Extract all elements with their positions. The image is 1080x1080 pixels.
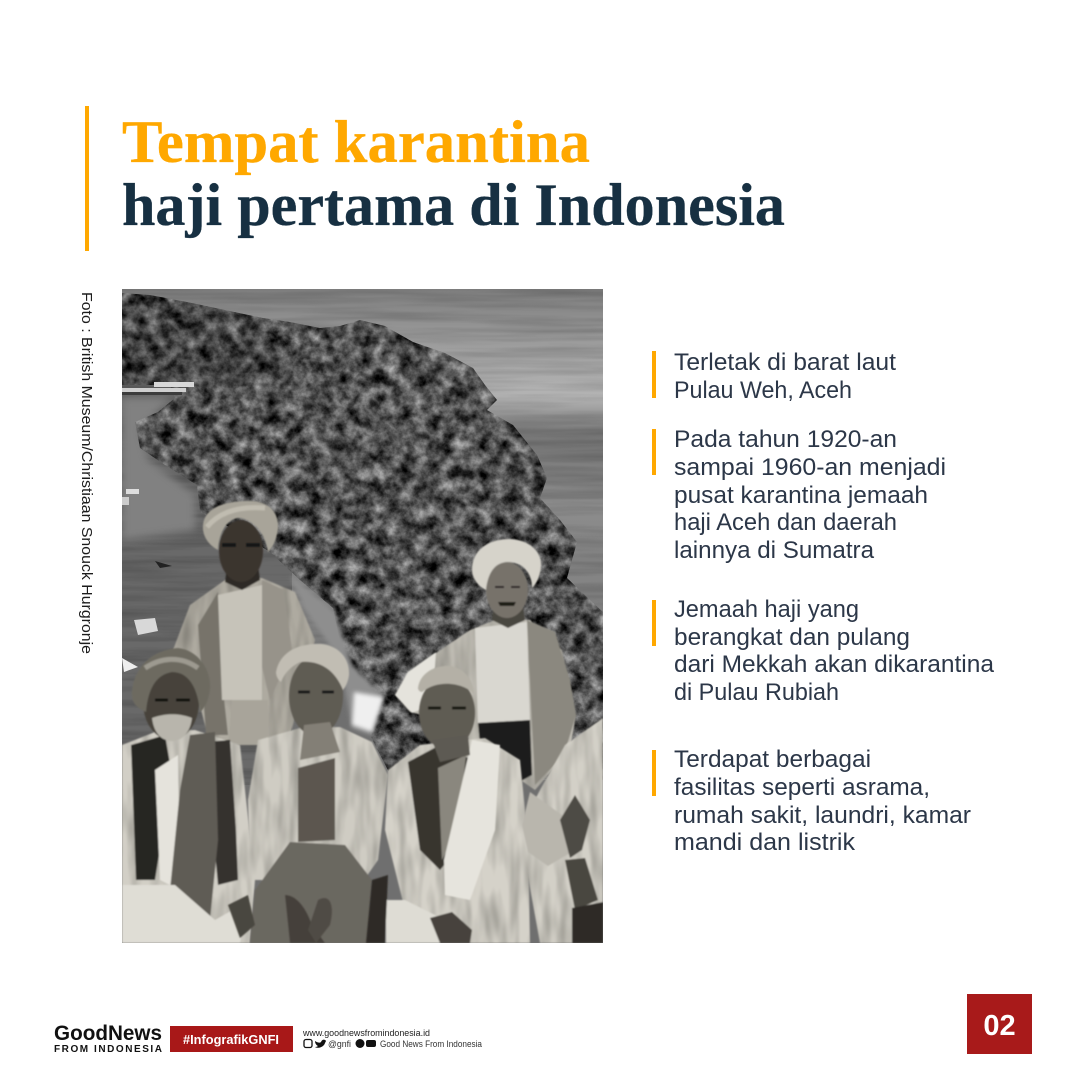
fact 3: berangkat dan pulang: [674, 624, 910, 651]
fact 4: Terdapat berbagai: [674, 746, 871, 773]
fact 3: di Pulau Rubiah: [674, 679, 839, 706]
shoreline foam: [290, 575, 382, 735]
title: haji pertama di Indonesia: [122, 172, 785, 238]
fact 2: [652, 426, 946, 564]
pilgrim standing left: [173, 501, 315, 745]
title: [122, 109, 785, 238]
logo: GoodNews From Indonesia: [54, 1022, 162, 1055]
pilgrim seated right of centre: [366, 666, 530, 943]
social and website info: www.goodnewsfromindonesia.id: [302, 1028, 430, 1038]
photo collage: island and hajj pilgrims: [122, 289, 603, 943]
fact 1: Pulau Weh, Aceh: [674, 377, 852, 404]
fact 3: dari Mekkah akan dikarantina: [674, 651, 995, 678]
fact 3: [652, 596, 995, 706]
logo: GoodNews From Indonesia: FROM INDONESIA: [54, 1044, 162, 1055]
social and website info: [302, 1028, 482, 1049]
logo: GoodNews From Indonesia: GoodNews: [54, 1022, 162, 1045]
fact 2: haji Aceh dan daerah: [674, 509, 897, 536]
fact 2: lainnya di Sumatra: [674, 537, 875, 564]
fact 2: Pada tahun 1920-an: [674, 426, 897, 453]
hashtag badge: #InfografikGNFI: [183, 1032, 279, 1047]
page number badge: [967, 994, 1032, 1054]
fact 4: rumah sakit, laundri, kamar: [674, 802, 971, 829]
sea background: [122, 289, 603, 943]
fact 2: pusat karantina jemaah: [674, 482, 928, 509]
icon: instagram: [304, 1040, 312, 1048]
pilgrim seated centre: [228, 644, 388, 943]
pilgrim seated far left: [122, 648, 255, 943]
fact 4: [652, 746, 971, 856]
fact 3: Jemaah haji yang: [674, 596, 859, 623]
lagoon: [122, 385, 292, 785]
pilgrim standing right: [395, 539, 576, 790]
social and website info: @gnfi: [328, 1039, 351, 1049]
fact 4: mandi dan listrik: [674, 829, 856, 856]
social and website info: Good News From Indonesia: [380, 1039, 482, 1049]
village on shore: [122, 382, 194, 395]
island forest: [122, 289, 603, 789]
fact 4: fasilitas seperti asrama,: [674, 774, 930, 801]
icon: facebook: [356, 1039, 364, 1048]
hashtag badge: [170, 1026, 293, 1052]
fact 1: [652, 349, 896, 404]
title accent bar: [85, 106, 89, 251]
pilgrim seated far right: [522, 718, 603, 943]
photo credit: Foto : British Museum/Christiaan Snouck Hurgronje: [78, 292, 95, 654]
icon: twitter: [315, 1040, 326, 1048]
icon: youtube: [366, 1040, 376, 1047]
page number badge: 02: [983, 1010, 1016, 1042]
fact 1: Terletak di barat laut: [674, 349, 896, 376]
title: Tempat karantina: [122, 109, 590, 175]
boats: [122, 489, 172, 672]
fact 2: sampai 1960-an menjadi: [674, 454, 946, 481]
